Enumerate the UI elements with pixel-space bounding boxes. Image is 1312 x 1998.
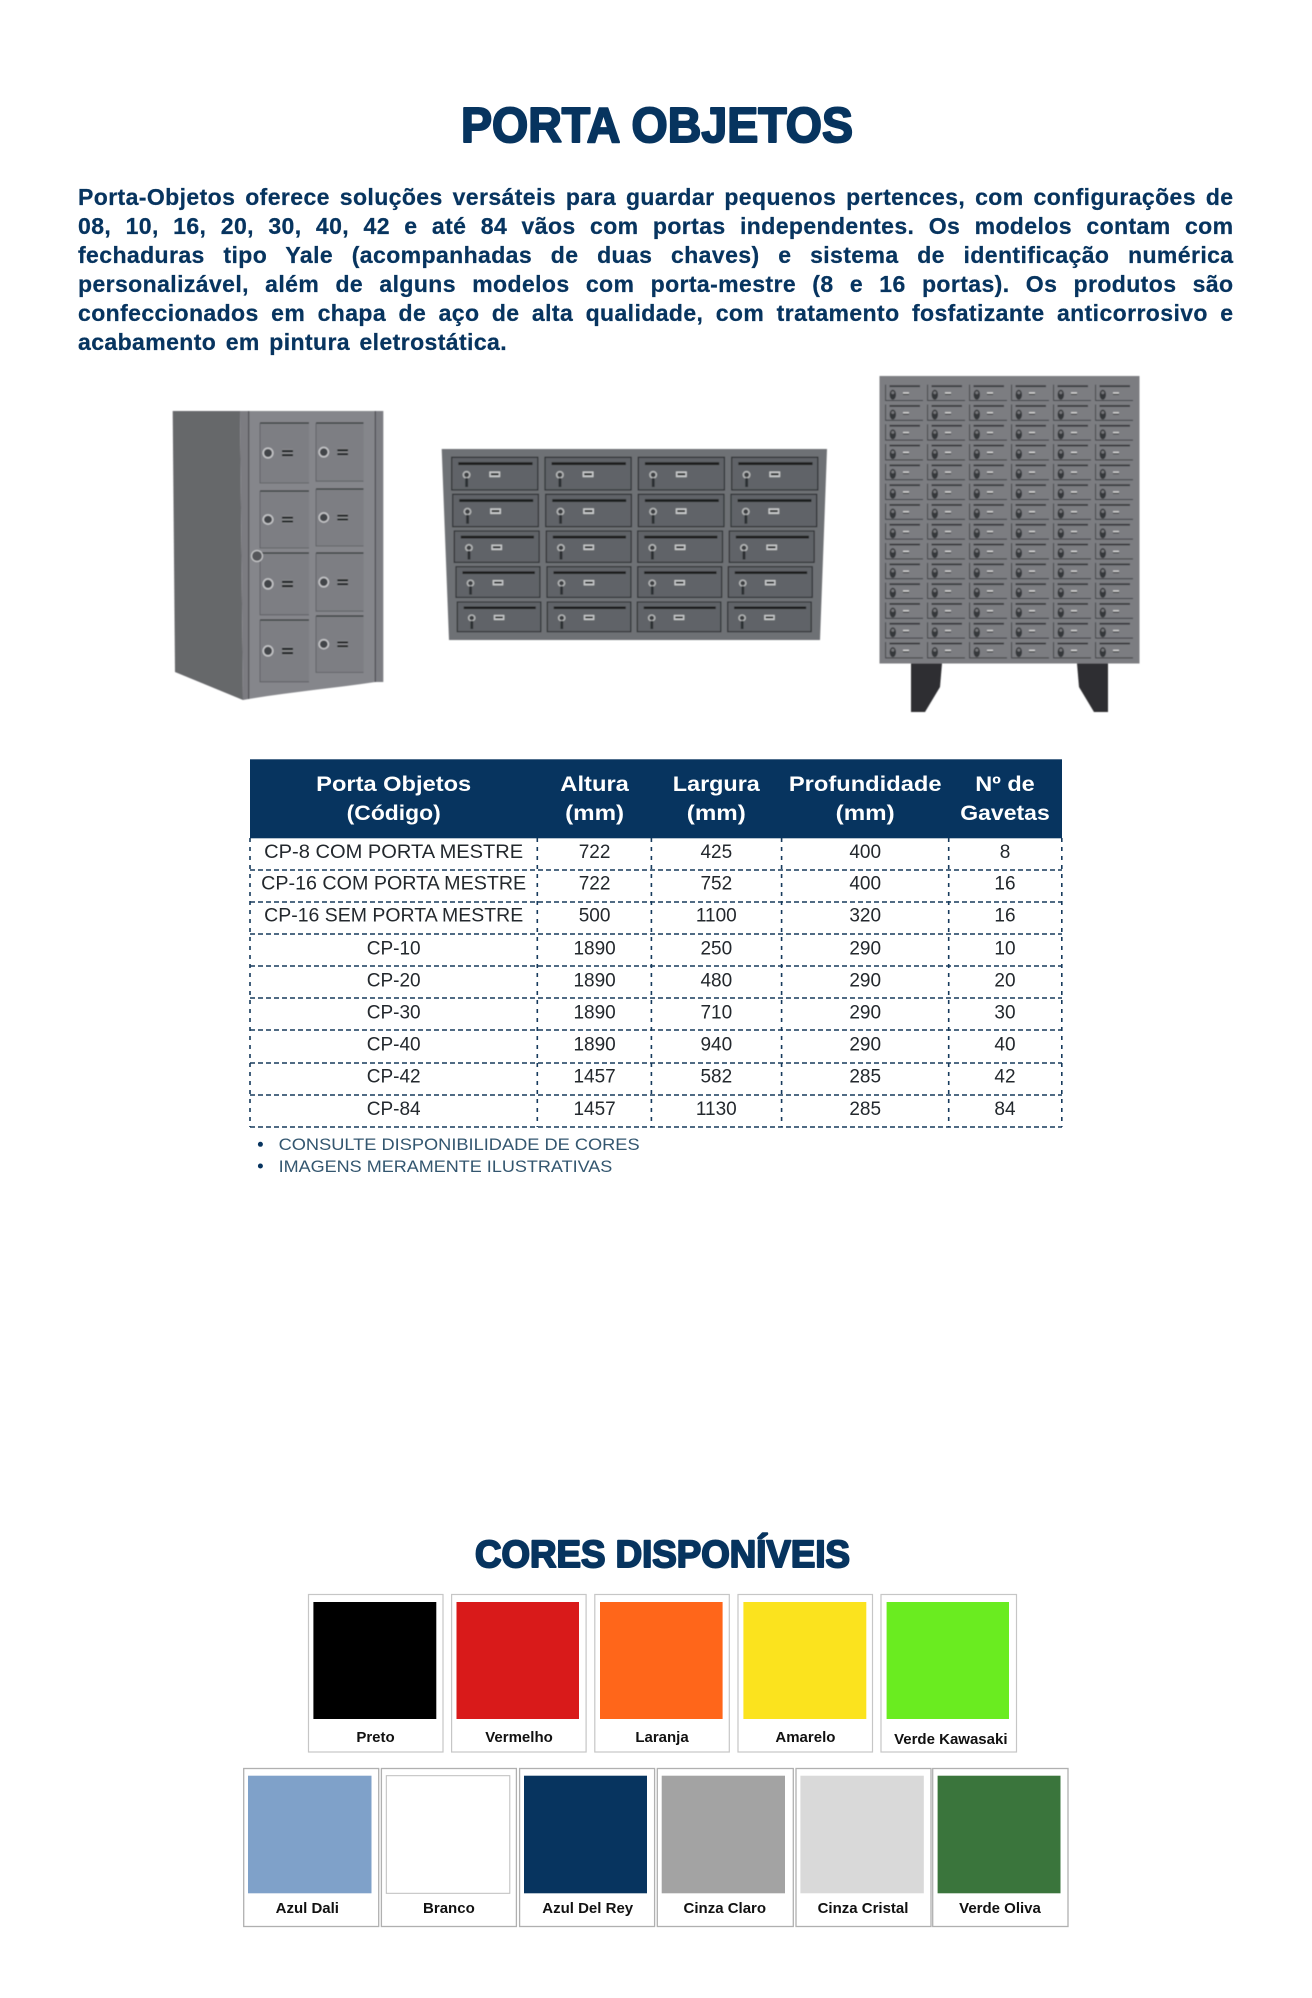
row CP-10: 10 <box>994 938 1016 960</box>
row CP-16 sem porta mestre: 320 <box>849 906 881 926</box>
row CP-30: CP-30 <box>367 1002 421 1024</box>
row CP-10 <box>367 938 1016 960</box>
swatch Cinza Cristal: Cinza Cristal <box>818 1900 908 1917</box>
row CP-42: 1457 <box>573 1067 616 1088</box>
colour swatches row 1 <box>308 1594 1016 1752</box>
colour swatches row 2 <box>244 1768 1068 1926</box>
swatch Verde Oliva <box>933 1768 1068 1926</box>
swatch Branco: Branco <box>423 1900 475 1917</box>
row CP-40: CP-40 <box>367 1034 421 1056</box>
row CP-8: 8 <box>1000 842 1010 863</box>
row CP-16 com porta mestre: CP-16 COM PORTA MESTRE <box>261 874 526 894</box>
intro paragraph <box>78 184 1234 356</box>
row CP-30: 1890 <box>573 1002 616 1024</box>
intro paragraph: acabamento em pintura eletrostática. <box>78 329 507 355</box>
row CP-16 com porta mestre <box>261 874 1016 894</box>
heading: available colours: CORES DISPONÍVEIS <box>475 1532 850 1576</box>
row CP-20: 1890 <box>573 970 616 992</box>
table <box>250 759 1062 1127</box>
row CP-20 <box>367 970 1016 992</box>
intro paragraph: Porta-Objetos oferece soluções versáteis para guardar pequenos pertences, com configurações de <box>78 184 1234 210</box>
intro paragraph: personalizável, além de alguns modelos com porta-mestre (8 e 16 portas). Os produtos são <box>78 271 1234 297</box>
row CP-84: 1130 <box>696 1099 737 1120</box>
row CP-84: CP-84 <box>367 1099 421 1120</box>
image: tall locker with 84 doors <box>880 376 1140 712</box>
intro paragraph: fechaduras tipo Yale (acompanhadas de duas chaves) e sistema de identificação numérica <box>78 242 1234 268</box>
row CP-42: 285 <box>849 1067 881 1088</box>
table notes: IMAGENS MERAMENTE ILUSTRATIVAS <box>279 1157 612 1176</box>
row CP-30: 30 <box>994 1002 1016 1024</box>
image: wall locker with 20 doors <box>442 449 827 640</box>
swatch Azul Dali: Azul Dali <box>276 1900 339 1917</box>
swatch Preto <box>308 1594 443 1752</box>
row CP-16 sem porta mestre: CP-16 SEM PORTA MESTRE <box>264 906 523 926</box>
row CP-8: 400 <box>849 842 881 863</box>
row CP-20: 20 <box>994 970 1016 992</box>
table header: Largura <box>673 773 760 796</box>
table notes <box>258 1135 640 1176</box>
row CP-40: 290 <box>849 1034 881 1056</box>
row CP-8: CP-8 COM PORTA MESTRE <box>264 842 523 863</box>
table header: (mm) <box>836 802 895 825</box>
row CP-16 sem porta mestre: 500 <box>579 906 610 926</box>
row CP-16 com porta mestre: 752 <box>700 874 732 894</box>
row CP-16 com porta mestre: 400 <box>849 874 881 894</box>
intro paragraph: confeccionados em chapa de aço de alta qualidade, com tratamento fosfatizante anticorrosivo e <box>78 300 1234 326</box>
table notes: CONSULTE DISPONIBILIDADE DE CORES <box>279 1135 640 1154</box>
row CP-16 com porta mestre: 16 <box>994 874 1016 894</box>
swatch Cinza Cristal <box>796 1768 931 1926</box>
row CP-8 <box>264 842 1010 863</box>
row CP-20: 290 <box>849 970 881 992</box>
row CP-84: 84 <box>994 1099 1016 1120</box>
row CP-10: 1890 <box>573 938 616 960</box>
row CP-40: 1890 <box>573 1034 616 1056</box>
swatch Vermelho: Vermelho <box>485 1729 553 1746</box>
row CP-16 sem porta mestre: 1100 <box>696 906 737 926</box>
row CP-10: 290 <box>849 938 881 960</box>
table header: Profundidade <box>789 773 942 796</box>
row CP-40: 40 <box>994 1034 1016 1056</box>
table header: Porta Objetos <box>316 773 471 796</box>
row CP-40: 940 <box>700 1034 732 1056</box>
row CP-10: 250 <box>700 938 732 960</box>
row CP-42: CP-42 <box>367 1067 421 1088</box>
image: locker with 8 doors <box>173 411 383 700</box>
title: PORTA OBJETOS <box>461 99 853 153</box>
table header <box>250 759 1062 838</box>
swatch Branco <box>381 1768 516 1926</box>
swatch Preto: Preto <box>356 1729 395 1746</box>
row CP-10: CP-10 <box>367 938 421 960</box>
row CP-42: 42 <box>994 1067 1016 1088</box>
table header: (mm) <box>565 802 624 825</box>
swatch Azul Del Rey: Azul Del Rey <box>542 1900 634 1917</box>
swatch Verde Kawasaki <box>881 1594 1016 1752</box>
table header: (mm) <box>687 802 746 825</box>
swatch Cinza Claro: Cinza Claro <box>684 1900 766 1917</box>
row CP-8: 425 <box>700 842 732 863</box>
row CP-30: 710 <box>700 1002 732 1024</box>
row CP-84: 1457 <box>573 1099 616 1120</box>
swatch Amarelo <box>738 1594 872 1752</box>
swatch Verde Oliva: Verde Oliva <box>959 1900 1042 1917</box>
table header: (Código) <box>347 802 441 825</box>
row CP-20: CP-20 <box>367 970 421 992</box>
row CP-30: 290 <box>849 1002 881 1024</box>
table header: Gavetas <box>960 802 1050 825</box>
swatch Laranja <box>595 1594 729 1752</box>
intro paragraph: 08, 10, 16, 20, 30, 40, 42 e até 84 vãos com portas independentes. Os modelos contam com <box>78 213 1234 239</box>
row CP-8: 722 <box>579 842 610 863</box>
row CP-84: 285 <box>849 1099 881 1120</box>
swatch Azul Del Rey <box>520 1768 655 1926</box>
swatch Cinza Claro <box>657 1768 793 1926</box>
row CP-84 <box>367 1099 1016 1120</box>
row CP-42: 582 <box>700 1067 732 1088</box>
swatch Vermelho <box>452 1594 586 1752</box>
row CP-42 <box>367 1067 1016 1088</box>
row CP-20: 480 <box>700 970 732 992</box>
swatch Azul Dali <box>244 1768 379 1926</box>
row CP-16 sem porta mestre: 16 <box>994 906 1016 926</box>
row CP-16 sem porta mestre <box>264 906 1016 926</box>
row CP-16 com porta mestre: 722 <box>579 874 610 894</box>
swatch Verde Kawasaki: Verde Kawasaki <box>894 1731 1008 1748</box>
table header: Nº de <box>975 773 1035 796</box>
swatch Amarelo: Amarelo <box>775 1729 835 1746</box>
table header: Altura <box>560 773 629 796</box>
row CP-40 <box>367 1034 1016 1056</box>
swatch Laranja: Laranja <box>635 1729 689 1746</box>
row CP-30 <box>367 1002 1016 1024</box>
